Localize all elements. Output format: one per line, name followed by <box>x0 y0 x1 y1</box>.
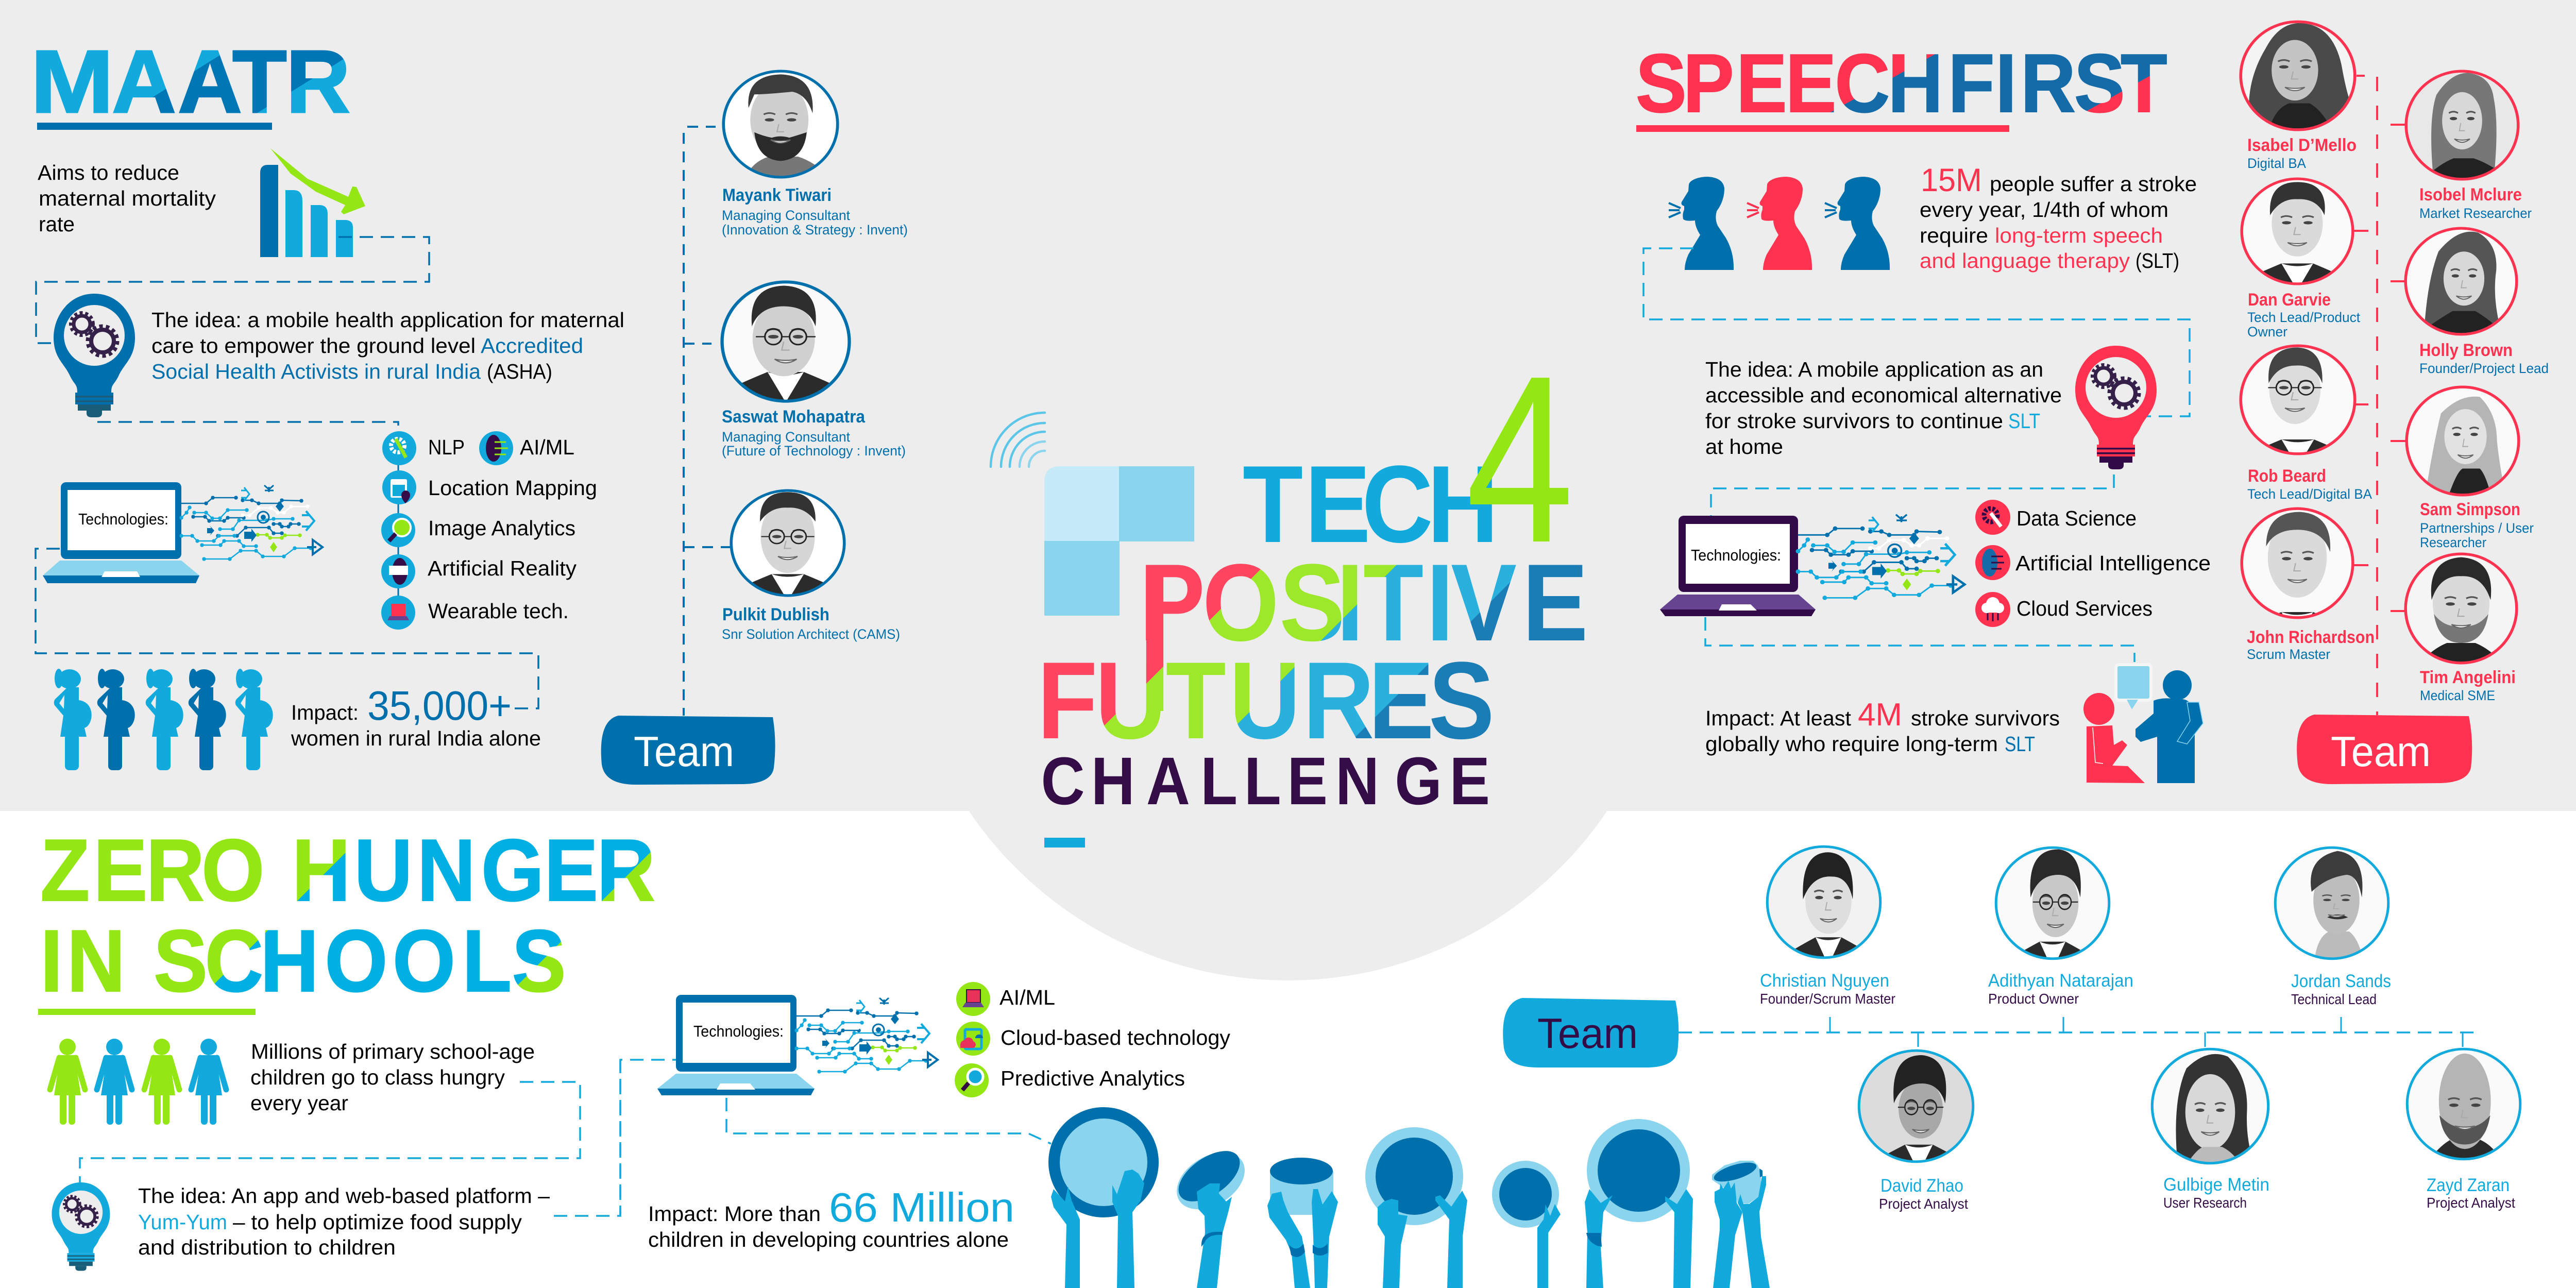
wristbands <box>1201 1232 1602 1257</box>
arrow: idea to technologies connector <box>97 422 398 426</box>
labels: technology names <box>2015 506 2211 620</box>
heading underline <box>37 123 272 130</box>
team member: Dan Garvie: Dan Garvie <box>2248 290 2331 310</box>
labels: technology names: Cloud-based technology <box>1001 1026 1230 1049</box>
arrow: problem to idea connector <box>36 237 429 343</box>
team member: Jordan Sands <box>2274 846 2391 1007</box>
text: impact: Impact: More than <box>648 1202 821 1226</box>
raised arms <box>1051 1170 1770 1288</box>
team member: Christian Nguyen <box>1760 845 1895 1007</box>
arrow: idea to technologies connector <box>554 1060 676 1216</box>
icon: wifi arcs <box>991 413 1045 467</box>
icon: artificial reality <box>381 554 415 588</box>
labels: technology names: Artificial Reality <box>428 556 577 580</box>
team member: Rob Beard: Rob Beard <box>2248 466 2326 486</box>
arrow: technologies to impact connector <box>620 1060 1051 1216</box>
heading underline <box>38 1009 256 1015</box>
team member: Dan Garvie: Tech Lead/Product <box>2247 310 2360 325</box>
team member: Isabel D'Mello <box>2240 21 2357 171</box>
text: problem: children go to class hungry <box>250 1065 505 1089</box>
team member: Sam Simpson: Researcher <box>2420 535 2486 550</box>
text: the idea: at home <box>1705 435 1783 459</box>
icon: location mapping <box>382 470 416 504</box>
text: problem <box>250 1040 535 1115</box>
text: the idea: accessible and economical alternative <box>1705 383 2062 407</box>
text: the idea: (ASHA) <box>487 360 552 383</box>
team member: Saswat Mohapatra: (Future of Technology : Invent) <box>722 443 906 459</box>
text: impact: SLT <box>2005 732 2035 756</box>
team member: Mayank Tiwari: Managing Consultant <box>722 208 850 223</box>
text: problem: Millions of primary school-age <box>251 1040 535 1063</box>
illustration: circuit lines <box>796 998 938 1072</box>
team member: Isabel D'Mello: Digital BA <box>2247 156 2306 171</box>
illustration: circuit lines <box>1798 515 1964 598</box>
labels: technology names: Wearable tech. <box>428 599 569 623</box>
illustration: technologies laptop <box>657 995 815 1095</box>
icon: image analytics <box>381 513 415 547</box>
heading: SPEECHFIRST: SPEECHFIRST <box>1636 37 2167 129</box>
connector: team line <box>1679 1017 2476 1047</box>
icon: idea light bulb <box>2075 346 2157 469</box>
team badge: ZERO HUNGER: Team <box>1537 1009 1638 1057</box>
team member: Isabel D'Mello: Isabel D’Mello <box>2247 135 2357 155</box>
labels: technology names: Image Analytics <box>428 516 575 540</box>
team member: Gulbige Metin: User Research <box>2163 1195 2247 1211</box>
team member: Mayank Tiwari <box>722 70 908 238</box>
icon: speaking heads <box>1669 177 1890 270</box>
icon: two people talking <box>2083 665 2203 783</box>
arrow: idea to technologies connector <box>1711 474 2114 516</box>
panel: ZERO HUNGER IN SCHOOLS <box>38 821 2521 1288</box>
labels: technology names: AI/ML <box>999 986 1055 1009</box>
team member: John Richardson: John Richardson <box>2247 628 2375 647</box>
text: impact: 4M <box>1858 697 1902 733</box>
team member: Adithyan Natarajan <box>1988 846 2133 1007</box>
connector: SPEECHFIRST team line <box>2354 76 2405 715</box>
text: impact: 35,000+ <box>367 683 512 728</box>
text: aim: rate <box>39 212 75 236</box>
team badge: SPEECHFIRST <box>2297 715 2472 784</box>
team badge: MAATR: Team <box>634 727 734 775</box>
text: the idea: Yum-Yum <box>138 1210 227 1234</box>
team member: Dan Garvie: Owner <box>2247 324 2287 340</box>
team member: Tim Angelini: Medical SME <box>2420 688 2495 703</box>
background: central grey circle <box>903 210 1673 980</box>
team member: Jordan Sands: Jordan Sands <box>2291 971 2391 991</box>
team member: Holly Brown: Founder/Project Lead <box>2419 361 2549 376</box>
logo word: POSITIVE: POSITIVE <box>1139 541 1588 664</box>
illustration: technologies laptop: Technologies: <box>1691 546 1781 564</box>
technology list <box>381 431 597 630</box>
text: problem: require <box>1920 224 1988 247</box>
labels: technology names: AI/ML <box>520 435 574 459</box>
illustration: technologies laptop: Technologies: <box>78 510 168 528</box>
labels: technology names <box>428 435 597 623</box>
icon: idea light bulb <box>54 294 135 417</box>
arrow: problem to idea connector <box>1643 248 2190 416</box>
team member: Christian Nguyen: Founder/Scrum Master <box>1760 991 1895 1007</box>
team member: John Richardson: Scrum Master <box>2247 647 2330 662</box>
arrow: technologies to impact connector <box>1705 617 2134 662</box>
icon: falling bar chart <box>260 148 365 257</box>
text: problem <box>1920 162 2197 273</box>
team member: Isobel Mclure: Isobel Mclure <box>2419 185 2522 205</box>
illustration: technologies laptop: Technologies: <box>693 1022 784 1040</box>
labels: technology names <box>999 986 1230 1090</box>
technology list <box>1975 500 2211 627</box>
text: problem: people suffer a stroke <box>1990 172 2197 196</box>
team badge: MAATR <box>601 716 775 785</box>
illustration: technologies laptop <box>1660 516 1816 616</box>
team member: Pulkit Dublish: Pulkit Dublish <box>722 605 829 624</box>
background: top grey band <box>0 0 2576 811</box>
logo stem joining P to U <box>1146 577 1163 711</box>
icon: pregnant women row <box>54 669 273 770</box>
text: the idea: – to help optimize food supply <box>233 1210 522 1234</box>
icon: AI/ML <box>479 431 513 465</box>
team member: Dan Garvie <box>2241 178 2360 340</box>
team member: Sam Simpson: Partnerships / User <box>2420 520 2534 536</box>
icon: AI/ML <box>956 982 990 1016</box>
labels: technology names: Location Mapping <box>428 476 597 500</box>
team member: Gulbige Metin <box>2151 1048 2269 1211</box>
text: aim <box>38 161 216 236</box>
text: the idea: care to empower the ground level <box>151 334 476 358</box>
panel: SPEECHFIRST <box>1636 21 2549 784</box>
text: aim: Aims to reduce <box>38 161 179 184</box>
team badge: SPEECHFIRST: Team <box>2331 727 2431 775</box>
text: impact: stroke survivors <box>1911 706 2060 730</box>
team member: Christian Nguyen: Christian Nguyen <box>1760 971 1889 991</box>
team member: Holly Brown: Holly Brown <box>2419 341 2513 360</box>
text: problem: (SLT) <box>2136 249 2179 273</box>
heading underline <box>1636 125 2009 132</box>
team member: John Richardson <box>2241 507 2375 662</box>
text: impact: Impact: <box>291 701 359 724</box>
text: impact <box>291 683 541 750</box>
icon: NLP <box>382 431 416 465</box>
team member: Gulbige Metin: Gulbige Metin <box>2163 1175 2269 1195</box>
text: problem: every year <box>250 1091 348 1115</box>
team member: Saswat Mohapatra: Managing Consultant <box>722 429 850 445</box>
team member: Isobel Mclure <box>2405 70 2532 221</box>
heading: ZERO HUNGER IN SCHOOLS: IN SCHOOLS <box>40 911 566 1010</box>
team member: Zayd Zaran: Project Analyst <box>2427 1195 2515 1211</box>
text: impact: Impact: At least <box>1705 706 1852 730</box>
logo word: FUTURES: FUTURES <box>1037 639 1495 761</box>
logo numeral: 4: 4 <box>1466 326 1574 592</box>
text: the idea: The idea: a mobile health application for maternal <box>151 308 624 332</box>
team member: Rob Beard: Tech Lead/Digital BA <box>2247 486 2372 502</box>
heading: MAATR: AATR <box>112 31 350 131</box>
icon: cloud-based technology <box>956 1022 990 1056</box>
team member: Holly Brown <box>2404 227 2549 376</box>
team member: Adithyan Natarajan: Product Owner <box>1988 991 2079 1007</box>
icon: row of children <box>50 1039 226 1125</box>
text: the idea: and distribution to children <box>138 1235 396 1259</box>
text: the idea <box>138 1184 550 1259</box>
illustration: circuit lines <box>181 485 323 559</box>
arrow: technologies to impact connector <box>36 549 538 708</box>
arrow: problem to idea connector <box>80 1082 580 1182</box>
icon: artificial intelligence <box>1975 545 2010 580</box>
team member: Rob Beard <box>2240 345 2372 502</box>
logo word: TECH: TECH <box>1243 443 1499 565</box>
icon: cloud services <box>1975 592 2010 627</box>
connector: MAATR team line <box>684 127 730 716</box>
team member: Tim Angelini: Tim Angelini <box>2420 668 2516 687</box>
team member: Zayd Zaran: Zayd Zaran <box>2427 1175 2510 1195</box>
logo wordmark <box>1037 443 1588 819</box>
bowls <box>1048 1107 1762 1228</box>
text: the idea: The idea: A mobile application as an <box>1705 358 2043 381</box>
text: the idea <box>151 308 624 383</box>
team member: Adithyan Natarajan: Adithyan Natarajan <box>1988 971 2133 991</box>
team member: David Zhao: Project Analyst <box>1879 1196 1968 1212</box>
logo accent bar <box>1044 838 1085 848</box>
labels: technology names: Artificial Intelligence <box>2015 551 2211 575</box>
icon: predictive analytics <box>955 1063 989 1097</box>
panel: MAATR <box>30 31 908 785</box>
labels: technology names: NLP <box>428 435 465 459</box>
team member: Tim Angelini <box>2404 553 2518 703</box>
team member: David Zhao: David Zhao <box>1880 1176 1963 1196</box>
team member: Saswat Mohapatra: Saswat Mohapatra <box>722 407 866 427</box>
team member: David Zhao <box>1858 1049 1974 1212</box>
labels: technology names: Data Science <box>2016 506 2137 530</box>
icon: wearable tech <box>381 596 415 630</box>
heading: ZERO HUNGER IN SCHOOLS: ZERO HUNGER <box>40 821 655 919</box>
illustration: hands holding bowls <box>1048 1107 1770 1288</box>
heading: ZERO HUNGER IN SCHOOLS <box>40 821 655 1010</box>
text: impact <box>648 1184 1014 1251</box>
team member: Sam Simpson <box>2405 386 2534 550</box>
text: impact <box>1705 697 2060 756</box>
team member: Jordan Sands: Technical Lead <box>2291 991 2377 1007</box>
panel: centre logo <box>991 326 1588 848</box>
team member: Isobel Mclure: Market Researcher <box>2419 206 2532 221</box>
text: impact: children in developing countries alone <box>648 1228 1009 1251</box>
team member: Mayank Tiwari: Mayank Tiwari <box>722 185 832 205</box>
text: impact: globally who require long-term <box>1705 732 1998 756</box>
text: the idea: SLT <box>2008 409 2040 433</box>
icon: data science <box>1975 500 2010 535</box>
logo word: CHALLENGE: CHALLENGE <box>1041 743 1490 819</box>
icon: idea light bulb <box>52 1182 110 1271</box>
technology list <box>955 982 1230 1097</box>
team member: Pulkit Dublish: Snr Solution Architect (CAMS) <box>722 626 900 642</box>
team member: Zayd Zaran <box>2406 1048 2521 1211</box>
text: problem: 15M <box>1921 162 1982 198</box>
text: problem: long-term speech <box>1995 224 2163 247</box>
text: the idea <box>1705 358 2062 459</box>
team member: Sam Simpson: Sam Simpson <box>2420 500 2520 519</box>
labels: technology names: Cloud Services <box>2016 597 2153 620</box>
text: problem: and language therapy <box>1920 249 2130 273</box>
labels: technology names: Predictive Analytics <box>1001 1066 1185 1090</box>
illustration: technologies laptop <box>43 482 199 583</box>
text: the idea: for stroke survivors to continue <box>1705 409 2003 433</box>
team member: Mayank Tiwari: (Innovation & Strategy : Invent) <box>722 222 908 238</box>
team badge: ZERO HUNGER <box>1503 998 1679 1067</box>
team member: Pulkit Dublish <box>722 489 900 642</box>
heading: MAATR: M <box>30 31 114 131</box>
logo squares <box>1044 466 1194 616</box>
text: the idea: Social Health Activists in rural India <box>151 360 481 383</box>
text: the idea: The idea: An app and web-based platform – <box>138 1184 550 1208</box>
team member: Saswat Mohapatra <box>721 281 906 459</box>
text: impact: 66 Million <box>829 1184 1014 1230</box>
text: the idea: Accredited <box>481 334 583 358</box>
text: impact: women in rural India alone <box>291 726 541 750</box>
text: aim: maternal mortality <box>39 187 216 210</box>
text: problem: every year, 1/4th of whom <box>1920 198 2168 222</box>
